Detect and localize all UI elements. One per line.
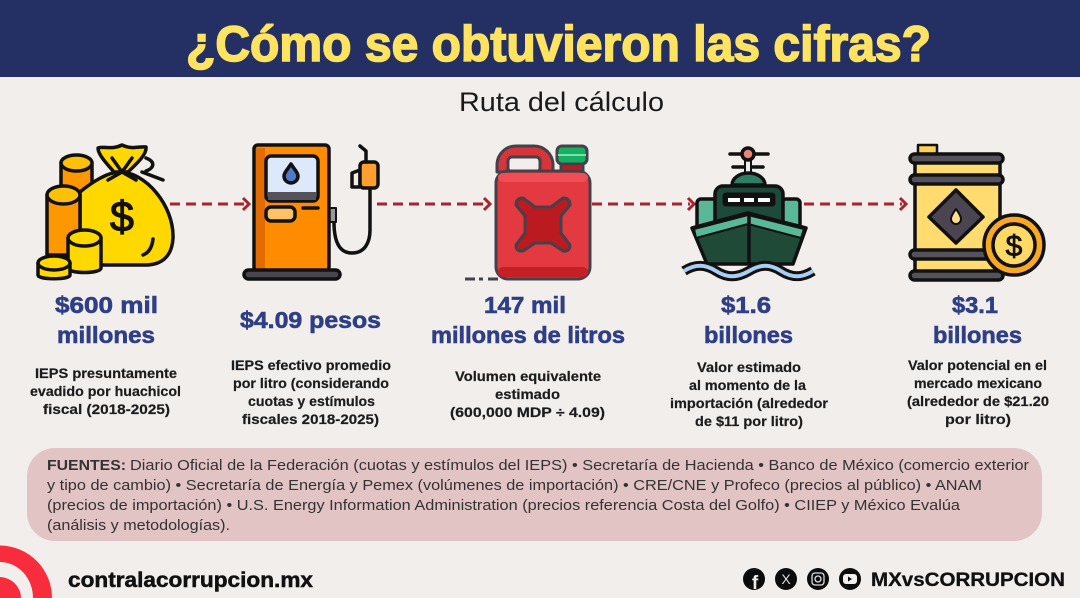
title: ¿Cómo se obtuvieron las cifras? xyxy=(186,16,931,72)
description: al momento de la xyxy=(689,378,807,393)
amount xyxy=(933,292,1022,348)
website: contralacorrupcion.mx xyxy=(68,569,313,592)
icon: fuel pump xyxy=(244,145,378,279)
sources text: (precios de importación) • U.S. Energy Information Administration (precios referencia Costa del Golfo) • CIIEP y México Evalúa xyxy=(47,498,961,514)
description: por litro (considerando xyxy=(233,376,389,391)
description xyxy=(907,358,1049,427)
description: Valor estimado xyxy=(697,360,801,375)
description xyxy=(670,360,829,429)
panel: step 2 IEPS por litro xyxy=(231,145,391,427)
panel: step 3 volumen xyxy=(431,146,625,420)
icon: coin dollar sign: $ xyxy=(1006,230,1023,263)
description: fiscales 2018-2025) xyxy=(242,412,379,427)
icon: instagram xyxy=(807,568,829,590)
description: Volumen equivalente xyxy=(455,369,602,384)
logo: red concentric arcs xyxy=(0,546,52,598)
panel: step 5 valor mercado xyxy=(907,145,1049,427)
description: (alrededor de $21.20 xyxy=(907,394,1049,409)
description: cuotas y estímulos xyxy=(248,394,375,409)
panel: step 1 IEPS evadido xyxy=(30,145,181,417)
description: por litro) xyxy=(945,412,1011,427)
arrow: step 4 to 5 xyxy=(804,198,906,210)
amount: $4.09 pesos xyxy=(240,307,381,333)
icon: X xyxy=(775,568,797,590)
icon: facebook xyxy=(743,568,765,594)
amount: millones de litros xyxy=(431,322,625,348)
icon: X: X xyxy=(781,571,791,587)
sources text: y tipo de cambio) • Secretaría de Energía y Pemex (volúmenes de importación) • CRE/CNE y Profeco (precios al público) • ANAM xyxy=(47,478,982,494)
description: (600,000 MDP ÷ 4.09) xyxy=(450,405,605,420)
header band xyxy=(0,0,1080,77)
panel: step 4 valor importación xyxy=(670,148,829,429)
arrow: step 2 to 3 xyxy=(377,198,490,210)
icon: youtube xyxy=(839,568,861,590)
amount xyxy=(431,292,625,348)
description: fiscal (2018-2025) xyxy=(43,402,170,417)
icon: money bag and coins xyxy=(38,145,173,279)
amount: $600 mil xyxy=(55,292,158,318)
description: estimado xyxy=(495,387,560,402)
amount: billones xyxy=(704,322,793,348)
sources text: FUENTES: xyxy=(47,458,126,474)
icon: waves xyxy=(684,266,813,276)
description: de $11 por litro) xyxy=(695,414,803,429)
icon: oil barrel with coin xyxy=(910,145,1044,280)
icon: cargo ship xyxy=(692,148,806,264)
panel: sources xyxy=(27,448,1042,541)
icon: dollar sign: $ xyxy=(110,193,134,241)
social handle: MXvsCORRUPCION xyxy=(871,570,1065,591)
arrow: step 1 to 2 xyxy=(170,198,249,210)
amount: 147 mil xyxy=(484,292,566,318)
description: IEPS presuntamente xyxy=(35,366,178,381)
description xyxy=(450,369,605,420)
sources text: Diario Oficial de la Federación (cuotas y estímulos del IEPS) • Secretaría de Hacienda • Banco de México (comercio exterior xyxy=(130,458,1029,474)
icon: red jerrycan xyxy=(465,146,590,279)
description: IEPS efectivo promedio xyxy=(231,358,391,373)
subtitle: Ruta del cálculo xyxy=(459,87,664,117)
icon: facebook: f xyxy=(752,573,759,594)
description: mercado mexicano xyxy=(914,376,1042,391)
arrow: step 3 to 4 xyxy=(592,198,694,210)
amount xyxy=(55,292,158,348)
description xyxy=(30,366,181,417)
amount: $3.1 xyxy=(952,292,998,318)
amount xyxy=(704,292,793,348)
amount: billones xyxy=(933,322,1022,348)
description: importación (alrededor xyxy=(670,396,829,411)
amount: millones xyxy=(57,322,155,348)
sources text: (análisis y metodologías). xyxy=(47,518,230,534)
description: Valor potencial en el xyxy=(908,358,1047,373)
amount: $1.6 xyxy=(721,292,771,318)
description: evadido por huachicol xyxy=(30,384,181,399)
sources text xyxy=(47,458,1029,534)
description xyxy=(231,358,391,427)
